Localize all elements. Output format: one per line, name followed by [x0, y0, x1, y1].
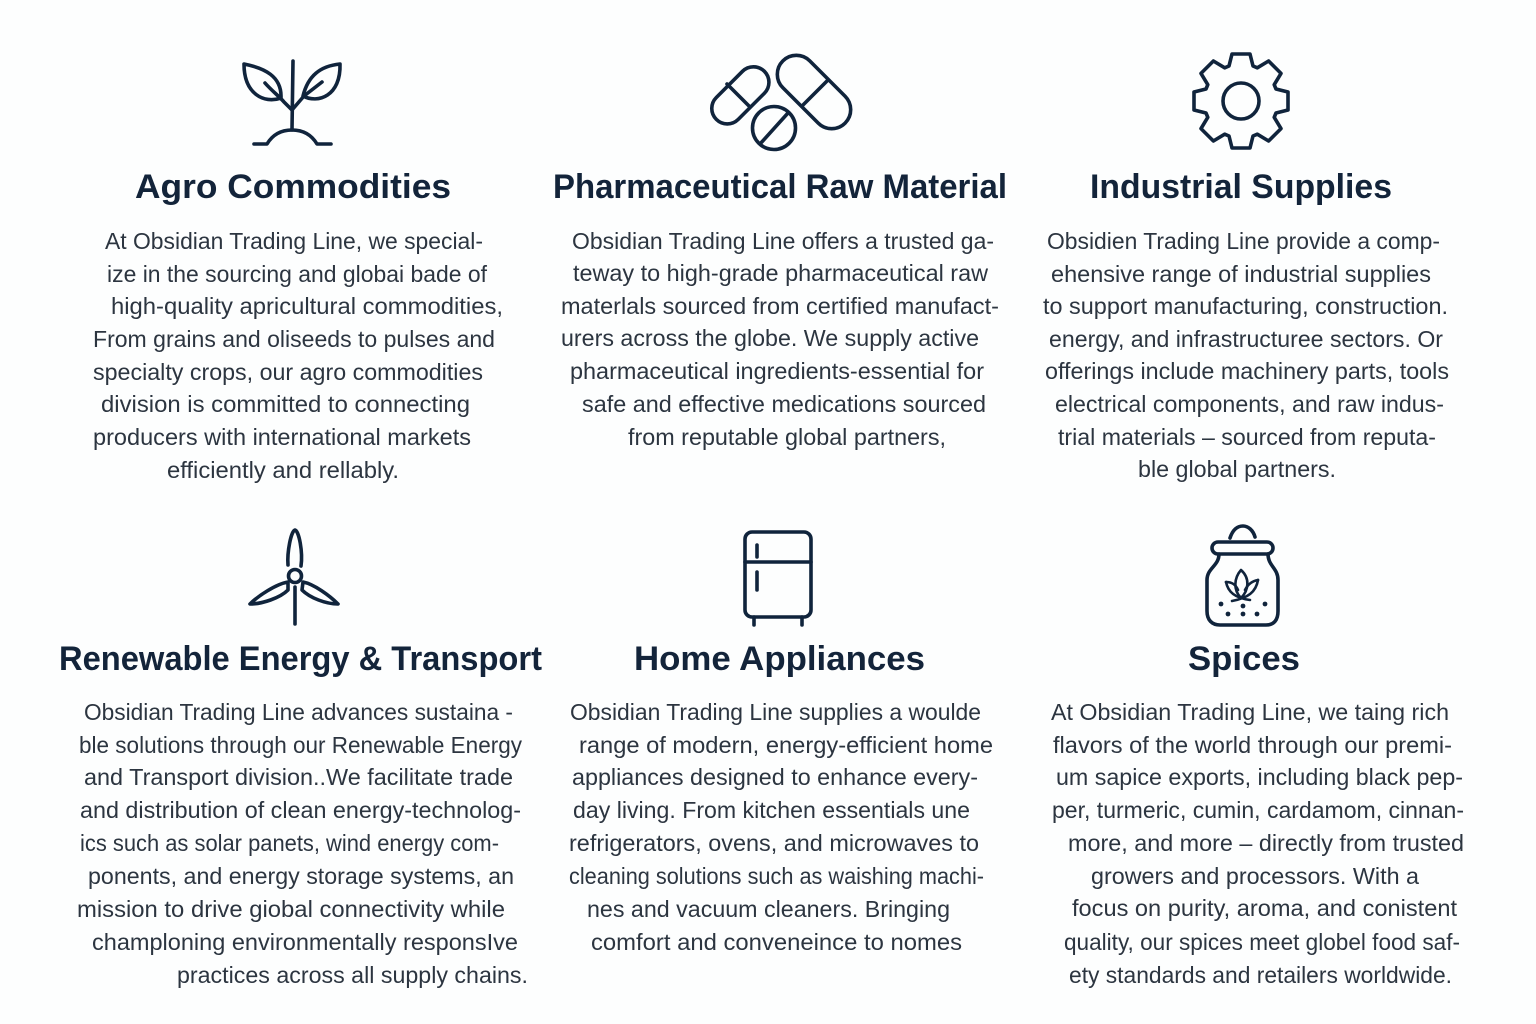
- text block: ponents, and energy storage systems, an: [88, 863, 514, 889]
- heading: Renewable Energy & Transport: [59, 640, 542, 678]
- text block: energy, and infrastructuree sectors. Or: [1049, 326, 1443, 352]
- icon: spice jar: [1207, 526, 1278, 625]
- text block: ics such as solar panets, wind energy com-: [80, 830, 499, 856]
- text block: From grains and oliseeds to pulses and: [93, 326, 495, 352]
- panel: Spices: [1051, 526, 1464, 988]
- heading: Home Appliances: [634, 640, 925, 678]
- panel: Industrial Supplies: [1043, 54, 1449, 482]
- icon: sprout: [244, 61, 340, 144]
- text block: and Transport division..We facilitate trade: [84, 764, 513, 790]
- text block: urers across the globe. We supply active: [561, 325, 979, 351]
- text block: focus on purity, aroma, and conistent: [1072, 895, 1458, 921]
- text block: producers with international markets: [93, 424, 471, 450]
- heading: Agro Commodities: [135, 168, 451, 206]
- text block: [77, 699, 528, 988]
- text block: efficiently and rellably.: [167, 457, 399, 483]
- icon: refrigerator: [745, 532, 811, 625]
- text block: division is committed to connecting: [101, 391, 470, 417]
- text block: [561, 228, 999, 450]
- text block: Obsidian Trading Line offers a trusted ga-: [572, 228, 994, 254]
- heading: Industrial Supplies: [1090, 168, 1392, 206]
- text block: practices across all supply chains.: [177, 962, 528, 988]
- heading: Spices: [1188, 640, 1300, 678]
- text block: and distribution of clean energy-technolog-: [80, 797, 521, 823]
- text block: refrigerators, ovens, and microwaves to: [569, 830, 979, 856]
- text block: high-quality apricultural commodities,: [111, 293, 503, 319]
- text block: specialty crops, our agro commodities: [93, 359, 483, 385]
- text block: safe and effective medications sourced: [582, 391, 986, 417]
- text block: At Obsidian Trading Line, we special-: [105, 228, 483, 254]
- text block: Obsidian Trading Line advances sustaina -: [84, 699, 513, 725]
- text block: cleaning solutions such as waishing machi-: [569, 863, 984, 889]
- text block: Obsidian Trading Line supplies a woulde: [570, 699, 981, 725]
- text block: [569, 699, 993, 955]
- text block: ble solutions through our Renewable Energy: [79, 732, 522, 758]
- panel: Renewable Energy & Transport: [59, 530, 542, 988]
- text block: trial materials – sourced from reputa-: [1058, 424, 1436, 450]
- text block: to support manufacturing, construction.: [1043, 293, 1448, 319]
- text block: nes and vacuum cleaners. Bringing: [587, 896, 950, 922]
- text block: [93, 228, 503, 483]
- text block: appliances designed to enhance every-: [572, 764, 978, 790]
- text block: teway to high-grade pharmaceutical raw: [573, 260, 988, 286]
- text block: from reputable global partners,: [628, 424, 946, 450]
- text block: champloning environmentally responsIve: [92, 929, 518, 955]
- icon: pills: [705, 47, 859, 150]
- text block: flavors of the world through our premi-: [1053, 732, 1452, 758]
- text block: [1043, 228, 1449, 482]
- text block: electrical components, and raw indus-: [1055, 391, 1444, 417]
- text block: um sapice exports, including black pep-: [1056, 764, 1463, 790]
- panel: Pharmaceutical Raw Material: [553, 47, 1007, 450]
- text block: Obsidien Trading Line provide a comp-: [1047, 228, 1440, 254]
- icon: gear: [1194, 54, 1288, 148]
- text block: mission to drive giobal connectivity while: [77, 896, 505, 922]
- text block: quality, our spices meet globel food saf-: [1064, 929, 1460, 955]
- text block: comfort and conveneince to nomes: [591, 929, 962, 955]
- text block: more, and more – directly from trusted: [1068, 830, 1464, 856]
- text block: per, turmeric, cumin, cardamom, cinnan-: [1052, 797, 1464, 823]
- text block: pharmaceutical ingredients-essential for: [570, 358, 984, 384]
- text block: ehensive range of industrial supplies: [1051, 261, 1431, 287]
- panel: Home Appliances: [569, 532, 993, 955]
- text block: At Obsidian Trading Line, we taing rich: [1051, 699, 1449, 725]
- text block: ble global partners.: [1138, 456, 1336, 482]
- icon: wind turbine: [250, 530, 338, 624]
- panel: Agro Commodities: [93, 61, 503, 483]
- text block: ety standards and retailers worldwide.: [1069, 962, 1452, 988]
- text block: materlals sourced from certified manufact-: [561, 293, 999, 319]
- text block: [1051, 699, 1464, 988]
- text block: range of modern, energy-efficient home: [579, 732, 993, 758]
- text block: ize in the sourcing and globai bade of: [107, 261, 488, 287]
- text block: growers and processors. With a: [1091, 863, 1419, 889]
- text block: offerings include machinery parts, tools: [1045, 358, 1449, 384]
- text block: day living. From kitchen essentials une: [573, 797, 970, 823]
- heading: Pharmaceutical Raw Material: [553, 168, 1007, 206]
